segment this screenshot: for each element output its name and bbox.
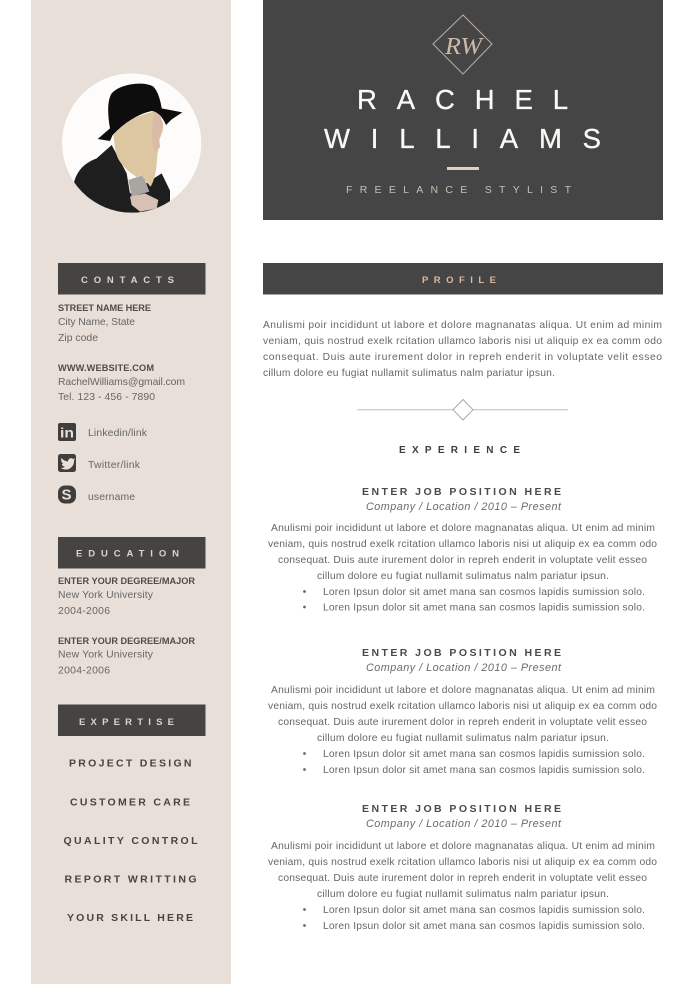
- profile paragraph: consequat. Duis aute irurement dolor in repreh enderit in voluptate velit esseo: [263, 352, 662, 363]
- website and contact details: WWW.WEBSITE.COM: [58, 363, 154, 373]
- job 1 description: cillum dolore eu fugiat nullamit sulimatus nalm pariatur ipsun.: [317, 571, 609, 582]
- heading bar: education: EDUCATION: [76, 548, 179, 560]
- job 1 description: Anulismi poir incididunt ut labore et dolore magnanatas aliqua. Ut enim ad minim: [271, 523, 655, 534]
- website and contact details: Tel. 123 - 456 - 7890: [58, 392, 155, 403]
- twitter label: Twitter/link: [88, 460, 141, 471]
- education entry 2: 2004-2006: [58, 666, 110, 676]
- job 2 bullets: Loren Ipsun dolor sit amet mana san cosmos lapidis sumission solo.: [323, 749, 645, 760]
- job 2 description: cillum dolore eu fugiat nullamit sulimatus nalm pariatur ipsun.: [317, 733, 609, 744]
- job 3 title: ENTER JOB POSITION HERE: [362, 803, 561, 815]
- website and contact details: RachelWilliams@gmail.com: [58, 377, 185, 388]
- job 3 bullets: [303, 905, 645, 932]
- job entry 2: [268, 647, 657, 776]
- heading: experience: EXPERIENCE: [399, 445, 520, 456]
- heading bar: education: [58, 537, 206, 568]
- job 3 description: veniam, quis nostrud exelk rcitation ullamco laboris nisi ut aliquip ex ea comm odo: [268, 857, 657, 868]
- job 3 description: cillum dolore eu fugiat nullamit sulimatus nalm pariatur ipsun.: [317, 889, 609, 900]
- job entry 1: [268, 486, 657, 614]
- education entry 2: New York University: [58, 650, 154, 660]
- profile paragraph: cillum dolore eu fugiat nullamit sulimatus nalm pariatur ipsun.: [263, 368, 555, 379]
- job 1 description: veniam, quis nostrud exelk rcitation ullamco laboris nisi ut aliquip ex ea comm odo: [268, 539, 657, 550]
- website and contact details: [58, 363, 185, 403]
- panel: expertise: [58, 704, 206, 924]
- job 2 description: consequat. Duis aute irurement dolor in repreh enderit in voluptate velit esseo: [278, 717, 647, 728]
- accent bar: [447, 167, 479, 170]
- heading bar: profile: [263, 263, 663, 294]
- address block: [58, 303, 151, 344]
- panel: sidebar background: [31, 0, 231, 984]
- address block: STREET NAME HERE: [58, 303, 151, 313]
- job 3 company: Company / Location / 2010 – Present: [366, 818, 562, 830]
- heading bar: contacts: [58, 263, 206, 294]
- education entry 1: [58, 576, 195, 617]
- icon: linkedin: [58, 423, 76, 441]
- job 1 title: ENTER JOB POSITION HERE: [362, 486, 561, 498]
- logo: RW diamond monogram: RW: [444, 34, 484, 60]
- linkedin label: Linkedin/link: [88, 428, 148, 439]
- job 1 bullets: [303, 587, 645, 614]
- profile paragraph: [263, 320, 662, 379]
- logo: RW diamond monogram: [433, 15, 492, 74]
- job 2 description: [268, 685, 657, 744]
- job 3 description: Anulismi poir incididunt ut labore et dolore magnanatas aliqua. Ut enim ad minim: [271, 841, 655, 852]
- address block: City Name, State: [58, 317, 135, 328]
- job 1 description: [268, 523, 657, 582]
- education entry 2: ENTER YOUR DEGREE/MAJOR: [58, 636, 195, 646]
- education entry 1: 2004-2006: [58, 606, 110, 617]
- divider with diamond: [357, 400, 568, 420]
- skill list: YOUR SKILL HERE: [67, 912, 193, 924]
- profile paragraph: veniam, quis nostrud exelk rcitation ullamco laboris nisi ut aliquip ex ea comm odo: [263, 336, 662, 347]
- job 2 bullets: [303, 749, 645, 776]
- heading bar: profile: PROFILE: [422, 275, 496, 286]
- profile paragraph: Anulismi poir incididunt ut labore et dolore magnanatas aliqua. Ut enim ad minim: [263, 320, 662, 331]
- job 3 bullets: Loren Ipsun dolor sit amet mana san cosmos lapidis sumission solo.: [323, 921, 645, 932]
- education entry 1: ENTER YOUR DEGREE/MAJOR: [58, 576, 195, 586]
- heading bar: contacts: CONTACTS: [81, 275, 174, 286]
- job 1 bullets: Loren Ipsun dolor sit amet mana san cosmos lapidis sumission solo.: [323, 587, 645, 598]
- heading bar: expertise: EXPERTISE: [79, 717, 174, 728]
- address block: Zip code: [58, 333, 98, 344]
- education entry 2: [58, 636, 195, 676]
- job 3 bullets: Loren Ipsun dolor sit amet mana san cosmos lapidis sumission solo.: [323, 905, 645, 916]
- skill list: QUALITY CONTROL: [64, 835, 198, 847]
- skill list: [64, 758, 198, 924]
- heading bar: expertise: [58, 704, 206, 736]
- job 2 description: Anulismi poir incididunt ut labore et dolore magnanatas aliqua. Ut enim ad minim: [271, 685, 655, 696]
- heading: last name: WILLIAMS: [324, 123, 601, 154]
- skill list: PROJECT DESIGN: [69, 758, 192, 770]
- job 2 bullets: Loren Ipsun dolor sit amet mana san cosmos lapidis sumission solo.: [323, 765, 645, 776]
- job 3 description: consequat. Duis aute irurement dolor in repreh enderit in voluptate velit esseo: [278, 873, 647, 884]
- education entry 1: New York University: [58, 590, 154, 601]
- job 1 bullets: Loren Ipsun dolor sit amet mana san cosmos lapidis sumission solo.: [323, 602, 645, 614]
- job 2 company: Company / Location / 2010 – Present: [366, 662, 562, 674]
- panel: name header: [263, 0, 663, 220]
- skill list: CUSTOMER CARE: [70, 796, 190, 808]
- job 2 description: veniam, quis nostrud exelk rcitation ullamco laboris nisi ut aliquip ex ea comm odo: [268, 701, 657, 712]
- icon: skype: [58, 486, 76, 504]
- icon: skype: S: [62, 486, 72, 504]
- job entry 3: [268, 803, 657, 932]
- panel: education: [58, 537, 206, 676]
- job 1 company: Company / Location / 2010 – Present: [366, 501, 562, 513]
- job 2 title: ENTER JOB POSITION HERE: [362, 647, 561, 659]
- heading: first name: RACHEL: [357, 84, 568, 115]
- job title: FREELANCE STYLIST: [346, 184, 572, 196]
- icon: linkedin: in: [60, 424, 74, 440]
- skill list: REPORT WRITTING: [64, 874, 196, 886]
- icon: twitter: [58, 454, 76, 472]
- skype label: username: [88, 492, 135, 503]
- job 1 description: consequat. Duis aute irurement dolor in repreh enderit in voluptate velit esseo: [278, 555, 647, 566]
- panel: contacts: [58, 263, 206, 504]
- portrait photo: [62, 73, 201, 217]
- job 3 description: [268, 841, 657, 900]
